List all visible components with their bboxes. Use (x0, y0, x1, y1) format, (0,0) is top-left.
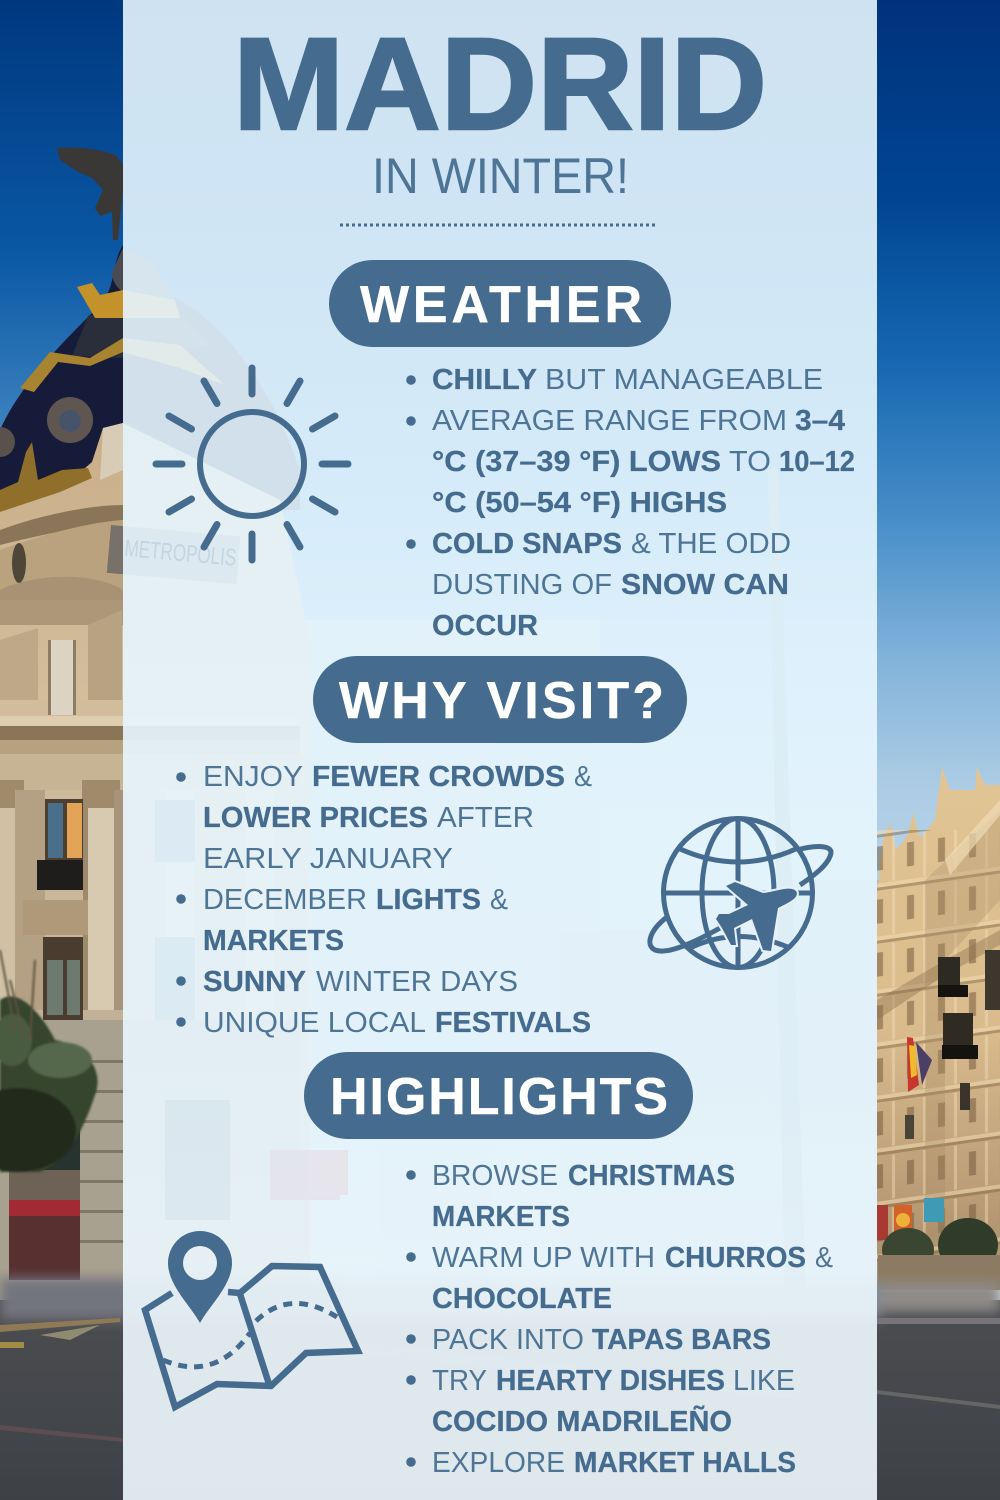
text block: weather bullets: AVERAGE RANGE FROM (432, 405, 787, 437)
upper ornate band (0, 577, 123, 625)
gold trims (77, 283, 180, 318)
text block: highlights bullets: MARKET HALLS (574, 1447, 796, 1479)
text block: why visit bullets: MARKETS (203, 925, 344, 957)
text block: why visit bullets: WINTER DAYS (316, 966, 518, 998)
text block: weather bullets: OCCUR (432, 610, 538, 642)
text block: highlights bullets: MARKETS (432, 1201, 570, 1233)
ghost sign lettering in photo: METROPOLIS (123, 535, 237, 572)
distant buildings behind panel (300, 620, 880, 1320)
text block: highlights bullets: LIKE (733, 1365, 795, 1397)
heading: highlights: HIGHLIGHTS (330, 1068, 668, 1126)
heading: why visit (313, 656, 687, 743)
lower wall (0, 1020, 300, 1320)
text block: why visit bullets: FEWER CROWDS (312, 761, 565, 793)
text block: why visit bullets: AFTER (437, 802, 534, 834)
text block: why visit bullets: ENJOY (203, 761, 303, 793)
text block: weather bullets: CHILLY (432, 364, 537, 396)
left building: Metropolis (0, 147, 348, 1320)
text block: why visit bullets: EARLY JANUARY (203, 843, 453, 875)
text block: highlights bullets (406, 1160, 833, 1479)
tree (0, 950, 98, 1172)
title (233, 10, 767, 204)
title: MADRID: MADRID (233, 10, 767, 157)
text block: why visit bullets: FESTIVALS (435, 1007, 591, 1039)
text block: highlights bullets: CHRISTMAS (568, 1160, 735, 1192)
icon: map with location pin (145, 1231, 358, 1407)
text block: highlights bullets: & (815, 1242, 833, 1274)
text block: highlights bullets: CHURROS (665, 1242, 806, 1274)
heading: highlights (304, 1052, 693, 1139)
text block: why visit bullets: LOWER PRICES (203, 802, 428, 834)
text block: highlights bullets: BROWSE (432, 1160, 558, 1192)
statue (57, 147, 123, 240)
text block: highlights bullets: PACK INTO (432, 1324, 584, 1356)
text block: why visit bullets: LIGHTS (376, 884, 481, 916)
text block: why visit bullets: & (574, 761, 592, 793)
shop shutters ghost (270, 1150, 340, 1200)
street (0, 1278, 1000, 1500)
text block: weather bullets: 10–12 (779, 446, 855, 478)
heading: weather (329, 260, 671, 347)
text block: weather bullets: DUSTING OF (432, 569, 612, 601)
lamp post (768, 470, 808, 1350)
heading: why visit: WHY VISIT? (339, 672, 664, 730)
subtitle: IN WINTER!: IN WINTER! (372, 148, 629, 204)
windows (45, 799, 83, 861)
text block: why visit bullets (176, 761, 592, 1039)
icon: globe with airplane (650, 818, 831, 968)
text block: weather bullets: TO (729, 446, 771, 478)
text block: highlights bullets: COCIDO MADRILEÑO (432, 1404, 732, 1438)
text block: weather bullets: °C (37–39 °F) LOWS (432, 446, 721, 478)
text block: weather bullets: COLD SNAPS (432, 528, 622, 560)
icon: sun (156, 368, 348, 560)
text block: weather bullets: °C (50–54 °F) HIGHS (432, 487, 727, 519)
text block: highlights bullets: EXPLORE (432, 1447, 565, 1479)
cornice (0, 716, 300, 726)
flag (907, 1037, 919, 1092)
dotted divider (340, 224, 656, 226)
text block: why visit bullets: SUNNY (203, 966, 306, 998)
right building (877, 767, 1000, 1290)
text block: why visit bullets: UNIQUE LOCAL (203, 1007, 426, 1039)
text block: weather bullets (406, 364, 855, 642)
columns (88, 790, 114, 1010)
text block: why visit bullets: & (490, 884, 508, 916)
text block: weather bullets: SNOW CAN (621, 569, 789, 601)
street trees (882, 1228, 934, 1272)
awnings and signs (877, 1205, 888, 1240)
text block: weather bullets: & THE ODD (631, 528, 791, 560)
text block: why visit bullets: DECEMBER (203, 884, 367, 916)
translucent content panel (123, 0, 877, 1500)
stone body (0, 423, 310, 1320)
text block: highlights bullets: TAPAS BARS (592, 1324, 771, 1356)
text block: highlights bullets: WARM UP WITH (432, 1242, 655, 1274)
text block: highlights bullets: CHOCOLATE (432, 1283, 612, 1315)
dome (0, 245, 300, 510)
text block: highlights bullets: HEARTY DISHES (496, 1365, 725, 1397)
heading: weather: WEATHER (360, 276, 642, 334)
text block: weather bullets: 3–4 (795, 405, 845, 437)
text block: highlights bullets: TRY (432, 1365, 487, 1397)
text block: weather bullets: BUT MANAGEABLE (545, 364, 823, 396)
shutter (9, 1170, 80, 1280)
